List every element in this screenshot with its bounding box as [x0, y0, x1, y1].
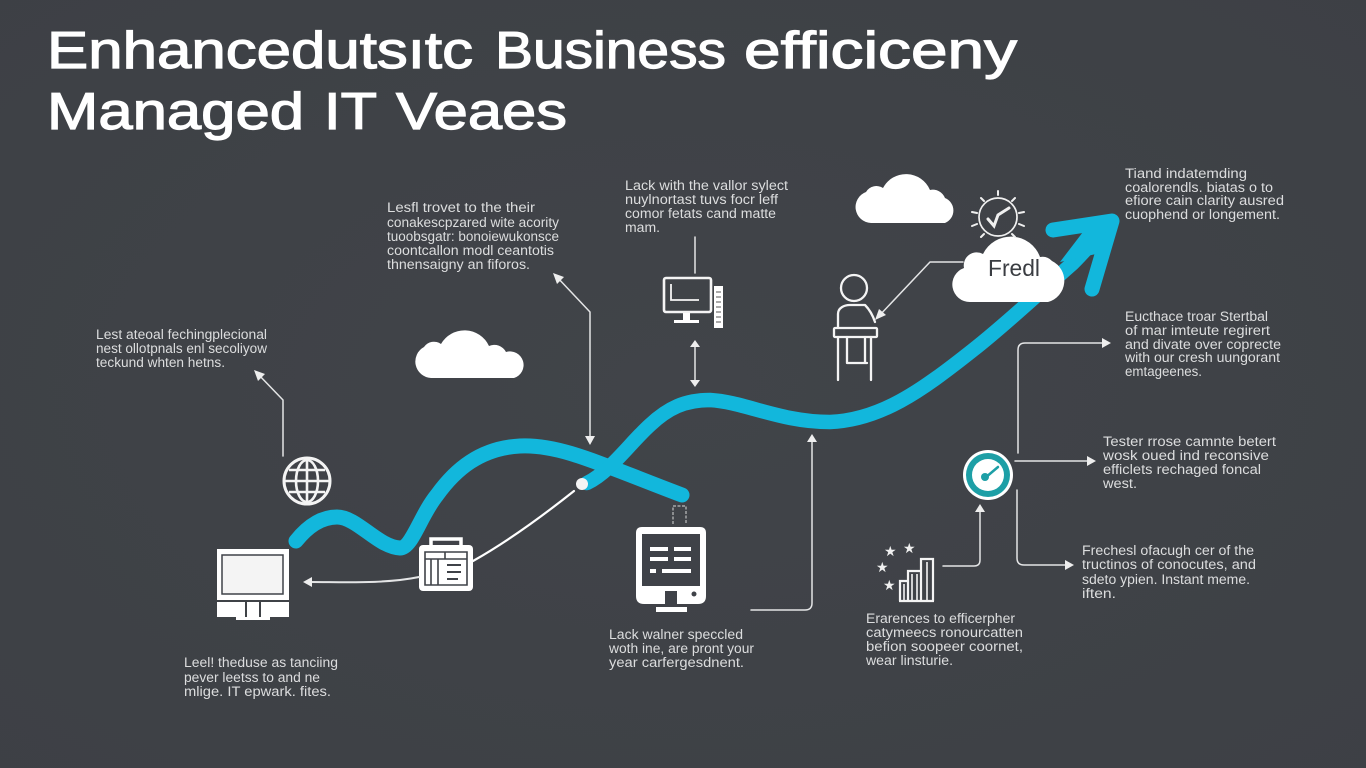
- text block: left: [96, 327, 267, 370]
- text block: bottom center right: [865, 611, 1023, 668]
- text block: bottom left: mlige. IT epwark. fites.: [184, 684, 331, 699]
- arrow: badge to lower right text: [1017, 490, 1074, 570]
- cloud: Fredl label: [952, 237, 1064, 302]
- text block: right upper: Eucthace troar Stertbal: [1125, 309, 1268, 324]
- icon: small monitor: [664, 278, 723, 328]
- text block: bottom center right: catymeecs ronourcatten: [866, 625, 1023, 640]
- icon: gear with check: [972, 191, 1024, 237]
- arrow: badge to right text: [1015, 456, 1096, 466]
- arrow: globe to text: [254, 370, 283, 456]
- text block: right upper: emtageenes.: [1125, 364, 1202, 379]
- text block: right upper: of mar imteute regirert: [1125, 323, 1270, 338]
- text block: top right: coalorendls. biatas o to: [1125, 180, 1273, 195]
- icon: clock check badge: [963, 450, 1013, 500]
- text block: top right: efiore cain clarity ausred: [1125, 193, 1284, 208]
- text block: top center: [625, 178, 788, 235]
- text block: bottom left: Leel! theduse as tanciing: [184, 655, 338, 670]
- text block: bottom center: Lack walner speccled: [609, 627, 743, 642]
- title: [47, 22, 1017, 141]
- text block: top right: Tiand indatemding: [1125, 166, 1247, 181]
- title: efficiceny: [744, 22, 1017, 80]
- text block: left: Lest ateoal fechingplecional: [96, 327, 267, 342]
- text block: bottom left: [184, 655, 338, 699]
- icon: person at desk: [834, 275, 877, 380]
- arrow: badge to upper right text: [1018, 338, 1111, 453]
- arrow: top text to curve: [553, 273, 595, 445]
- text block: top center: comor fetats cand matte: [625, 206, 776, 221]
- text block: upper middle: thnensaigny an fiforos.: [387, 257, 530, 272]
- title: Business: [495, 22, 726, 80]
- text block: left: teckund whten hetns.: [96, 355, 225, 370]
- cyan growth arrow: [296, 221, 1112, 548]
- arrow: desktop to curve: [751, 434, 817, 610]
- icon: bar chart with stars: ★: [903, 540, 916, 556]
- text block: right upper: with our cresh uungorant: [1124, 350, 1280, 365]
- text block: right middle: [1102, 434, 1276, 491]
- text block: bottom center: woth ine, are pront your: [608, 641, 755, 656]
- icon: large monitor: [217, 549, 289, 620]
- title: IT: [324, 83, 377, 141]
- text block: top right: [1125, 166, 1284, 222]
- arrow: monitor vertical links: [690, 237, 700, 387]
- text block: bottom center right: Erarences to efficerpher: [866, 611, 1016, 626]
- text block: right lower: [1082, 543, 1256, 601]
- text block: right upper: [1124, 309, 1281, 379]
- arrow: briefcase to monitor: [303, 577, 419, 587]
- text block: upper middle: [387, 200, 559, 272]
- icon: bar chart with stars: [876, 540, 934, 601]
- arrow: cloud to person: [875, 262, 963, 320]
- text block: bottom left: pever leetss to and ne: [184, 670, 320, 685]
- text block: upper middle: coontcallon modl ceantotis: [387, 243, 554, 258]
- cloud: top: [856, 174, 953, 223]
- text block: top center: Lack with the vallor sylect: [625, 178, 788, 193]
- icon: briefcase: [419, 539, 473, 591]
- text block: top center: mam.: [625, 220, 660, 235]
- icon: bar chart with stars: ★: [883, 577, 896, 593]
- text block: bottom center: [608, 627, 755, 670]
- arrow: curve dot to briefcase: [473, 478, 588, 561]
- title: Enhancedutsıtc: [47, 22, 473, 80]
- text block: upper middle: tuoobsgatr: bonoiewukonsce: [387, 229, 559, 244]
- text block: top right: cuophend or longement.: [1125, 207, 1280, 222]
- icon: globe: [284, 458, 330, 504]
- icon: dashed connector box: [673, 506, 686, 524]
- text block: left: nest ollotpnals enl secoliyow: [96, 341, 267, 356]
- title: Managed: [47, 83, 304, 141]
- text block: bottom center right: wear linsturie.: [865, 653, 953, 668]
- text block: right lower: tructinos of conocutes, and: [1082, 557, 1256, 572]
- text block: right lower: Frechesl ofacugh cer of the: [1082, 543, 1254, 558]
- text block: bottom center right: befion soopeer coornet,: [866, 639, 1023, 654]
- text block: top center: nuylnortast tuvs focr leff: [625, 192, 778, 207]
- cloud: left: [415, 330, 524, 378]
- text block: right lower: iften.: [1082, 586, 1116, 601]
- text block: right middle: efficlets rechaged foncal: [1103, 462, 1261, 477]
- cloud: Fredl label: Fredl: [988, 255, 1040, 281]
- text block: upper middle: conakescpzared wite acority: [387, 215, 559, 230]
- icon: desktop screen: [636, 527, 706, 612]
- title: Veaes: [396, 83, 567, 141]
- text block: upper middle: Lesfl trovet to the their: [387, 200, 536, 215]
- icon: bar chart with stars: ★: [884, 543, 897, 559]
- text block: right middle: Tester rrose camnte betert: [1103, 434, 1276, 449]
- arrow: chart to badge: [943, 504, 985, 566]
- text block: right middle: wosk oued ind reconsive: [1102, 448, 1269, 463]
- icon: bar chart with stars: ★: [876, 559, 889, 575]
- text block: right middle: west.: [1102, 476, 1137, 491]
- text block: right lower: sdeto ypien. Instant meme.: [1082, 572, 1250, 587]
- text block: bottom center: year carfergesdnent.: [609, 655, 744, 670]
- text block: right upper: and divate over coprecte: [1125, 337, 1281, 352]
